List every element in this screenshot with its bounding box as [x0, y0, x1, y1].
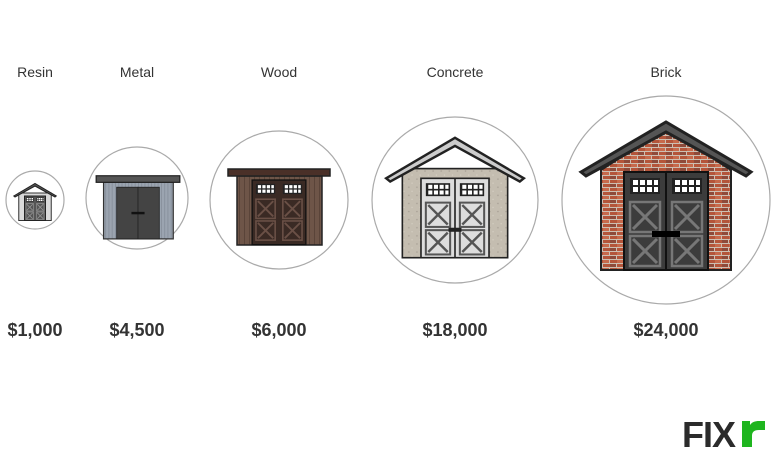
- circle: wood: [210, 131, 348, 269]
- price: brick: $24,000: [633, 320, 699, 340]
- label: Metal: Metal: [120, 64, 154, 80]
- price: wood: $6,000: [251, 320, 307, 340]
- label: Resin: Resin: [17, 64, 53, 80]
- price: concrete: $18,000: [422, 320, 488, 340]
- circle: brick: [562, 96, 770, 304]
- icon: concrete shed: [386, 138, 524, 258]
- price: resin: $1,000: [7, 320, 63, 340]
- label: Wood: Wood: [261, 64, 297, 80]
- circle: concrete: [372, 117, 538, 283]
- price: metal: $4,500: [109, 320, 165, 340]
- label: Concrete: Concrete: [427, 64, 484, 80]
- icon: resin shed: [14, 184, 56, 220]
- icon: metal shed: [96, 176, 180, 239]
- icon: brick shed: [581, 122, 751, 270]
- icon: wood shed: [228, 169, 330, 245]
- circle: metal: [86, 147, 188, 249]
- circle: resin: [6, 171, 64, 229]
- logo: fixr: [682, 414, 765, 453]
- label: Brick: Brick: [650, 64, 683, 80]
